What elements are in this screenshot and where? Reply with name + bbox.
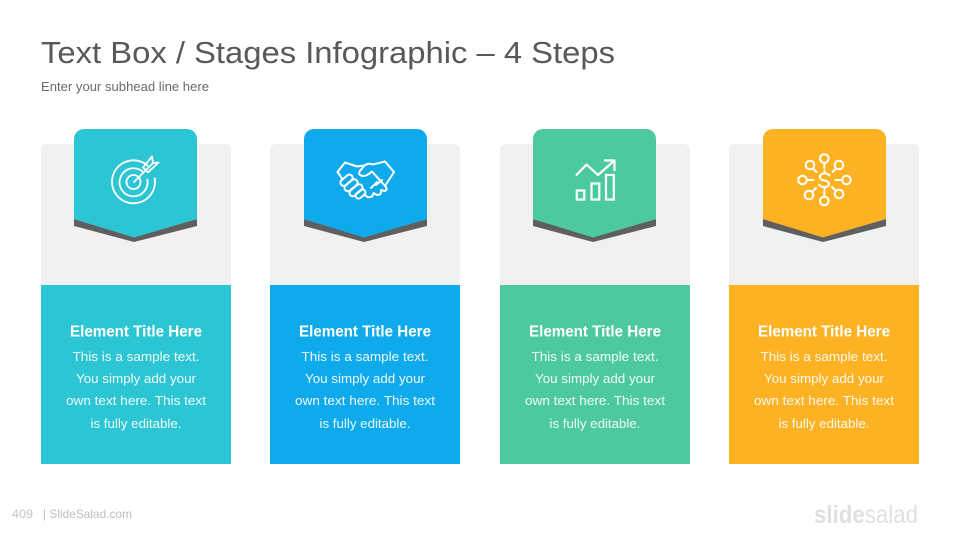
text block: [754, 324, 894, 431]
text block: is fully editable.: [550, 416, 640, 431]
text block: is fully editable.: [90, 416, 182, 431]
text block: is fully editable.: [320, 416, 410, 431]
panel: step 2: [270, 129, 460, 464]
icon: growth chart: [576, 160, 614, 200]
text block: own text here. This text: [66, 393, 206, 408]
icon: money network: [798, 154, 851, 205]
logo wordmark: slidesalad: [814, 501, 918, 529]
text block: [66, 324, 206, 431]
text block: This is a sample text.: [760, 349, 888, 364]
text block: own text here. This text: [295, 393, 435, 408]
panel: step 4: [729, 129, 919, 464]
text block: This is a sample text.: [72, 349, 200, 364]
tab: [74, 129, 197, 238]
panel: step 3: [500, 129, 690, 464]
tab shadow: [533, 219, 656, 242]
text block: You simply add your: [76, 371, 197, 386]
text block: You simply add your: [305, 371, 426, 386]
text block: You simply add your: [764, 371, 885, 386]
text block: is fully editable.: [778, 416, 870, 431]
tab shadow: [763, 219, 886, 242]
icon: target with arrow: [112, 156, 158, 203]
text block: [525, 324, 665, 431]
text block: This is a sample text.: [532, 349, 658, 364]
footer: site: | SlideSalad.com: [43, 507, 132, 521]
text block: Element Title Here: [70, 324, 202, 340]
text block: Element Title Here: [299, 324, 431, 340]
text block: You simply add your: [535, 371, 656, 386]
footer: page number: 409: [12, 507, 33, 521]
icon: handshake: [338, 162, 394, 200]
text block: Element Title Here: [529, 324, 661, 340]
text block: [295, 324, 435, 431]
subhead: Enter your subhead line here: [41, 80, 209, 94]
text block: own text here. This text: [754, 393, 894, 408]
tab shadow: [74, 219, 197, 242]
tab shadow: [304, 219, 427, 242]
text block: This is a sample text.: [302, 349, 428, 364]
title: Text Box / Stages Infographic – 4 Steps: [41, 35, 615, 70]
panel: step 1: [41, 129, 231, 464]
text block: own text here. This text: [525, 393, 665, 408]
text block: Element Title Here: [758, 324, 890, 340]
tab: [304, 129, 427, 238]
tab: [763, 129, 886, 238]
tab: [533, 129, 656, 238]
